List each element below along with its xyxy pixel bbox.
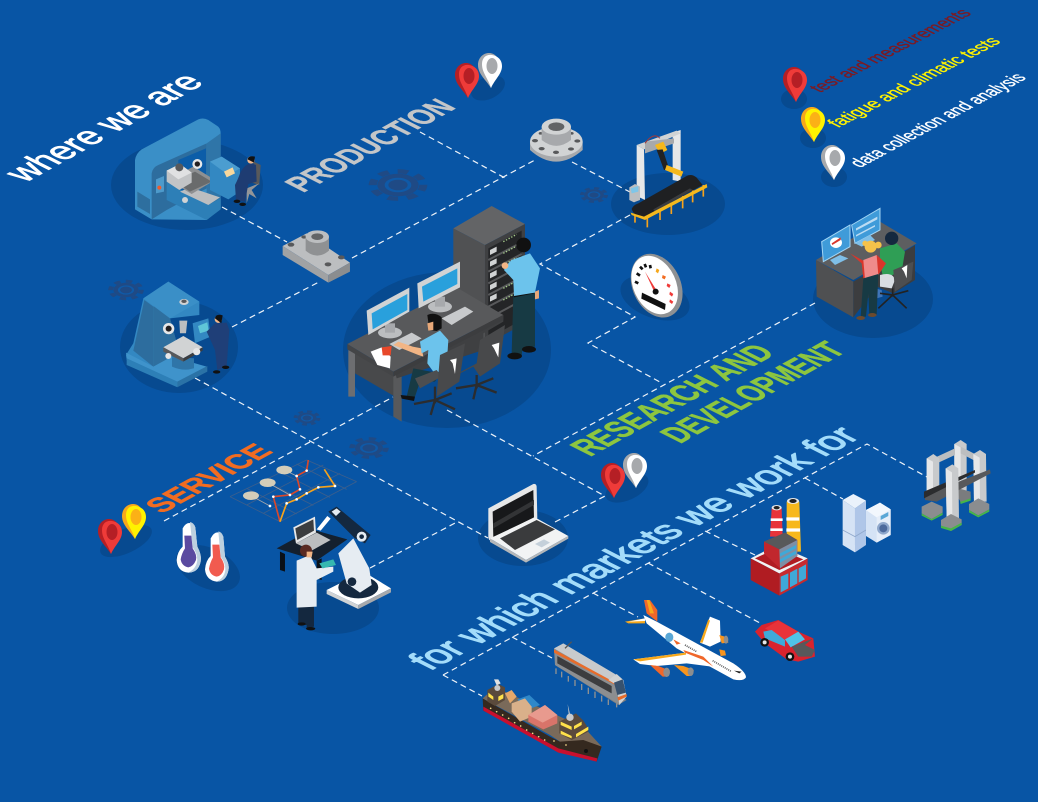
research and development desk <box>816 208 917 320</box>
dashed connector lines <box>164 132 927 696</box>
factory <box>751 498 808 596</box>
heading: research and development: DEVELOPMENT <box>651 336 854 448</box>
robot arm lab scene <box>277 507 391 630</box>
legend: fatigue and climatic tests: fatigue and climatic tests <box>823 34 1006 130</box>
server rack <box>453 206 525 345</box>
heading: where we are: where we are <box>0 68 213 187</box>
fridge and washing machine <box>843 494 891 552</box>
seated technician and chairs <box>393 314 505 415</box>
milling machine with seated operator <box>135 118 261 220</box>
icon: research pins <box>601 453 647 498</box>
standing technician <box>502 238 540 359</box>
icon: production pins <box>455 53 502 98</box>
train <box>554 642 627 707</box>
heading: production: PRODUCTION <box>276 94 463 196</box>
heading: service: SERVICE <box>137 439 280 517</box>
cargo ship <box>483 679 602 762</box>
desk <box>347 287 503 422</box>
icon: yellow pin legend <box>801 107 825 142</box>
chart with data bubbles <box>230 460 357 522</box>
laptop <box>488 484 568 563</box>
part block <box>283 230 350 283</box>
flange part <box>530 119 583 162</box>
heading: research and development: RESEARCH AND <box>561 339 784 461</box>
conveyor with robot arm <box>629 130 707 227</box>
thermometers <box>177 522 229 582</box>
speedometer gauge <box>621 245 692 326</box>
heading: for which markets we work for: for which markets we work for <box>399 421 869 675</box>
floor shadows <box>96 70 933 634</box>
bridge structure <box>922 440 991 531</box>
car <box>755 620 815 662</box>
airplane <box>625 600 746 680</box>
icon: white pin legend <box>821 145 845 180</box>
monitors <box>367 262 473 350</box>
icon: service pins <box>98 504 146 554</box>
icon: red pin legend <box>783 67 807 102</box>
paper and cup <box>371 346 392 368</box>
gear icons <box>111 171 606 457</box>
drilling machine with standing operator <box>126 282 229 387</box>
central workstation with server rack and technicians <box>347 206 540 422</box>
